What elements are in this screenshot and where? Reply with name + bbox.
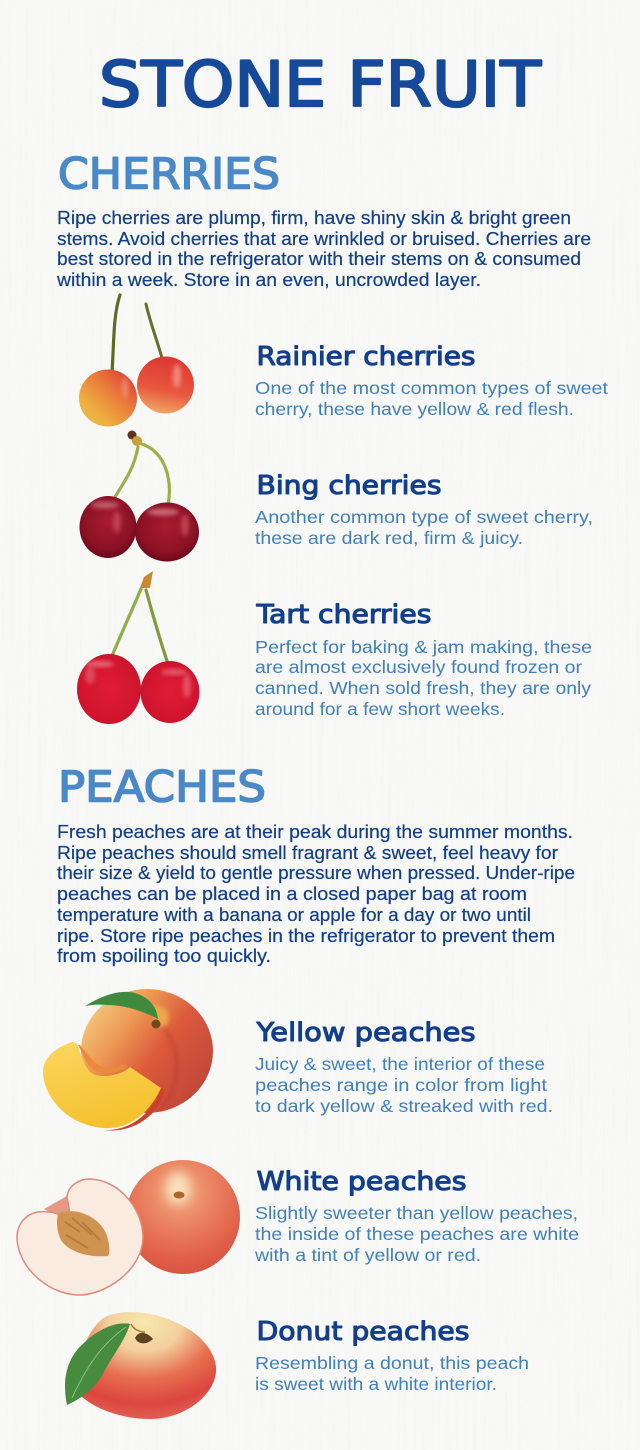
panel: peaches <box>17 762 579 1419</box>
text: white peaches: White peaches <box>256 1167 466 1197</box>
panel: cherries <box>56 150 608 724</box>
text: rainier cherries: cherry, these have yellow & red flesh. <box>255 399 574 419</box>
text block: peaches intro: peaches can be placed in a closed paper bag at room <box>57 883 527 904</box>
text: rainier cherries <box>255 342 608 419</box>
text: tart cherries: Tart cherries <box>255 600 432 630</box>
text: yellow peaches: to dark yellow & streaked with red. <box>255 1096 553 1116</box>
text: donut peaches: Donut peaches <box>256 1317 470 1347</box>
text block: peaches intro: their size & yield to gentle pressure when pressed. Under-ripe <box>57 862 575 883</box>
text block: cherries intro <box>56 207 591 290</box>
heading: peaches: PEACHES <box>58 762 266 812</box>
text block: peaches intro <box>57 821 575 966</box>
text block: cherries intro: within a week. Store in an even, uncrowded layer. <box>56 269 481 290</box>
text: donut peaches: Resembling a donut, this peach <box>255 1353 529 1373</box>
icon: tart cherries <box>77 571 200 724</box>
text: rainier cherries: Rainier cherries <box>256 342 476 372</box>
text: bing cherries: Another common type of sweet cherry, <box>255 507 593 527</box>
heading: cherries: CHERRIES <box>58 150 280 200</box>
text block: peaches intro: from spoiling too quickly. <box>57 945 271 966</box>
icon: bing cherries <box>80 430 199 562</box>
icon: yellow peach <box>43 989 213 1131</box>
text block: peaches intro: Ripe peaches should smell fragrant & sweet, feel heavy for <box>57 842 558 863</box>
text block: peaches intro: Fresh peaches are at their peak during the summer months. <box>57 821 573 842</box>
text block: peaches intro: ripe. Store ripe peaches in the refrigerator to prevent them <box>57 925 555 946</box>
text block: cherries intro: stems. Avoid cherries that are wrinkled or bruised. Cherries are <box>57 228 591 249</box>
text: yellow peaches <box>255 1018 553 1116</box>
icon: donut peach <box>65 1312 216 1419</box>
text: yellow peaches: Yellow peaches <box>255 1018 476 1048</box>
text: white peaches: with a tint of yellow or red. <box>254 1245 481 1265</box>
text block: cherries intro: Ripe cherries are plump, firm, have shiny skin & bright green <box>57 207 571 228</box>
text: bing cherries: these are dark red, firm & juicy. <box>255 528 523 548</box>
text: donut peaches: is sweet with a white interior. <box>255 1374 497 1394</box>
text: tart cherries: Perfect for baking & jam making, these <box>255 637 592 657</box>
text: white peaches: Slightly sweeter than yellow peaches, <box>255 1203 578 1223</box>
icon: rainier cherries <box>79 295 194 426</box>
text: donut peaches <box>255 1317 529 1394</box>
text: yellow peaches: Juicy & sweet, the interior of these <box>255 1054 545 1074</box>
text: bing cherries: Bing cherries <box>256 471 442 501</box>
text: bing cherries <box>255 471 593 548</box>
text: tart cherries: canned. When sold fresh, they are only <box>255 678 591 698</box>
text: tart cherries: around for a few short weeks. <box>255 699 505 719</box>
text block: peaches intro: temperature with a banana or apple for a day or two until <box>57 904 531 925</box>
title: STONE FRUIT <box>99 48 542 121</box>
text: white peaches: the inside of these peaches are white <box>255 1224 579 1244</box>
icon: white peach <box>17 1160 240 1295</box>
text block: cherries intro: best stored in the refrigerator with their stems on & consumed <box>57 248 581 269</box>
text: tart cherries <box>255 600 592 719</box>
text: rainier cherries: One of the most common types of sweet <box>255 378 608 398</box>
text: white peaches <box>254 1167 579 1265</box>
text: yellow peaches: peaches range in color from light <box>255 1075 547 1095</box>
text: tart cherries: are almost exclusively found frozen or <box>255 657 582 677</box>
